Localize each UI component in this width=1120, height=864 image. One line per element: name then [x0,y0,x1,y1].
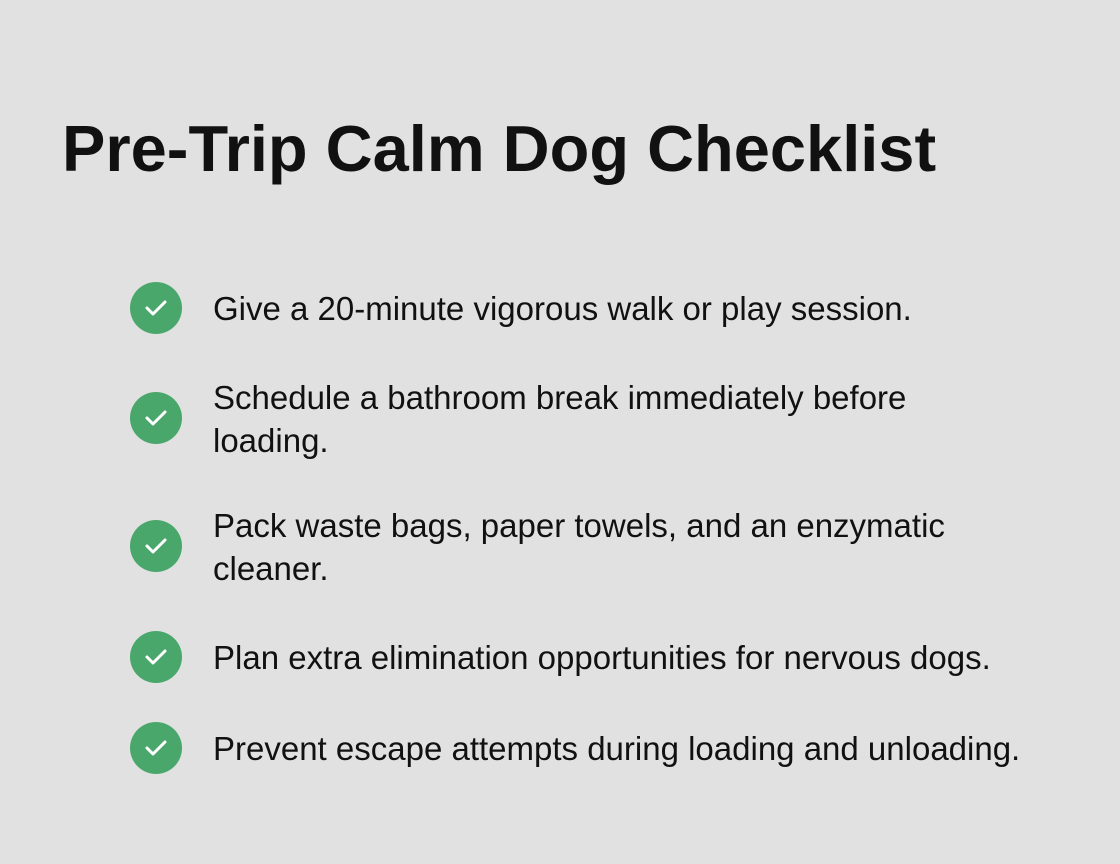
text: Give a 20-minute vigorous walk or play session. [213,290,912,327]
text [213,507,945,587]
text [213,379,906,459]
item 1 [130,282,912,334]
icon: check [130,392,182,444]
item 3 [130,507,945,587]
icon: check [130,631,182,683]
icon: check [130,722,182,774]
text: Plan extra elimination opportunities for nervous dogs. [213,639,991,676]
item 2 [130,379,906,459]
text: cleaner. [213,550,329,587]
icon: check [130,282,182,334]
title: Pre-Trip Calm Dog Checklist [62,112,936,185]
text: Prevent escape attempts during loading and unloading. [213,730,1020,767]
icon: check [130,520,182,572]
text: loading. [213,422,329,459]
text: Pack waste bags, paper towels, and an enzymatic [213,507,945,544]
text: Schedule a bathroom break immediately before [213,379,906,416]
item 4 [130,631,991,683]
item 5 [130,722,1020,774]
